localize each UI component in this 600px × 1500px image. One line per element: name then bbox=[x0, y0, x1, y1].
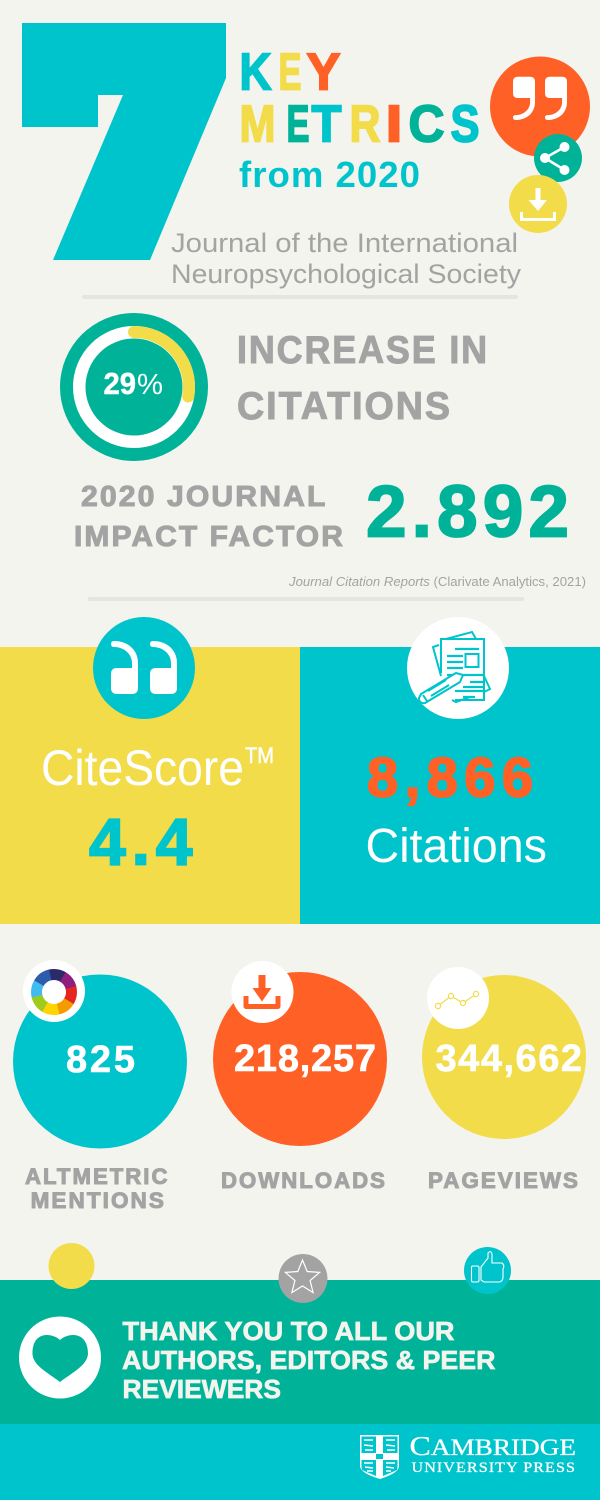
value: 2.892: 2.892 bbox=[366, 472, 569, 552]
subtitle: from 2020: from 2020 bbox=[239, 154, 421, 195]
label: CiteScore: CiteScore bbox=[41, 740, 244, 796]
logo text bbox=[410, 1431, 576, 1476]
heading: increase in citations: INCREASE IN bbox=[237, 329, 489, 372]
panel: Citations bbox=[300, 617, 600, 924]
label: pageviews: PAGEVIEWS bbox=[428, 1168, 580, 1193]
label: CiteScore: TM bbox=[245, 743, 274, 768]
title: KEY: Y bbox=[306, 44, 340, 102]
source note: Journal Citation Reports (Clarivate Analytics, 2021) bbox=[288, 574, 586, 589]
icon: documents and pencil bbox=[407, 617, 509, 719]
label: altmetric mentions: ALTMETRIC bbox=[25, 1164, 170, 1189]
icon: orange quote bubble bbox=[490, 56, 590, 156]
title: METRICS: I bbox=[386, 96, 402, 154]
donut chart: 29%: 29 bbox=[104, 366, 136, 401]
icon: star bbox=[278, 1254, 328, 1303]
panel: thank-you band bbox=[0, 1280, 600, 1424]
value: 344,662: 344,662 bbox=[436, 1038, 582, 1080]
title: METRICS: R bbox=[350, 96, 380, 154]
icon: line graph bbox=[427, 967, 489, 1029]
title: METRICS: T bbox=[312, 96, 342, 154]
label: Citations: Citations bbox=[366, 820, 547, 873]
donut chart: 29% bbox=[60, 313, 208, 461]
icon: heart bbox=[19, 1316, 101, 1398]
title: KEY: K bbox=[240, 44, 272, 102]
logo text: UNIVERSITY PRESS bbox=[412, 1460, 576, 1476]
icon: yellow dot bbox=[48, 1243, 94, 1289]
journal name: Journal of the International bbox=[171, 228, 518, 258]
icon: download orange bbox=[232, 961, 294, 1023]
label: 2020 journal impact factor bbox=[74, 481, 345, 553]
metric: pageviews bbox=[422, 967, 586, 1193]
icon: download yellow bbox=[509, 175, 567, 233]
metric: downloads bbox=[213, 961, 387, 1193]
label: 2020 journal impact factor: 2020 JOURNAL bbox=[81, 481, 328, 513]
journal name bbox=[171, 228, 522, 289]
value: 218,257: 218,257 bbox=[234, 1038, 376, 1080]
big numeral 7 bbox=[22, 23, 226, 260]
icon: university shield bbox=[360, 1435, 399, 1479]
thank-you message bbox=[122, 1316, 496, 1404]
journal name: Neuropsychological Society bbox=[171, 259, 522, 289]
icon: thumbs up bbox=[464, 1247, 511, 1294]
icon: altmetric donut bbox=[23, 960, 85, 1022]
label: 2020 journal impact factor: IMPACT FACTOR bbox=[74, 521, 345, 553]
icon: share bbox=[534, 134, 582, 182]
label: altmetric mentions bbox=[25, 1164, 170, 1213]
icon: open quote bbox=[93, 617, 195, 719]
title: METRICS: C bbox=[408, 96, 444, 154]
title: KEY bbox=[240, 44, 340, 102]
heading: increase in citations bbox=[237, 329, 489, 428]
title: KEY: E bbox=[278, 44, 302, 102]
label: altmetric mentions: MENTIONS bbox=[31, 1188, 166, 1213]
metric: altmetric mentions bbox=[13, 960, 187, 1213]
title: METRICS: S bbox=[450, 96, 480, 154]
thank-you message: REVIEWERS bbox=[122, 1374, 281, 1404]
donut chart: 29%: % bbox=[137, 369, 163, 401]
logo text: CAMBRIDGE bbox=[410, 1431, 576, 1461]
value: 8,866: 8,866 bbox=[367, 746, 533, 808]
title: METRICS: E bbox=[286, 96, 310, 154]
value: 825: 825 bbox=[66, 1039, 135, 1081]
value: 4.4: 4.4 bbox=[89, 804, 193, 878]
thank-you message: AUTHORS, EDITORS & PEER bbox=[122, 1345, 496, 1375]
panel: publisher footer bbox=[0, 1424, 600, 1500]
title: METRICS bbox=[240, 96, 480, 154]
panel: CiteScore bbox=[0, 617, 300, 924]
title: METRICS: M bbox=[240, 96, 276, 154]
thank-you message: THANK YOU TO ALL OUR bbox=[122, 1316, 455, 1346]
heading: increase in citations: CITATIONS bbox=[237, 385, 452, 428]
label: downloads: DOWNLOADS bbox=[221, 1168, 387, 1193]
